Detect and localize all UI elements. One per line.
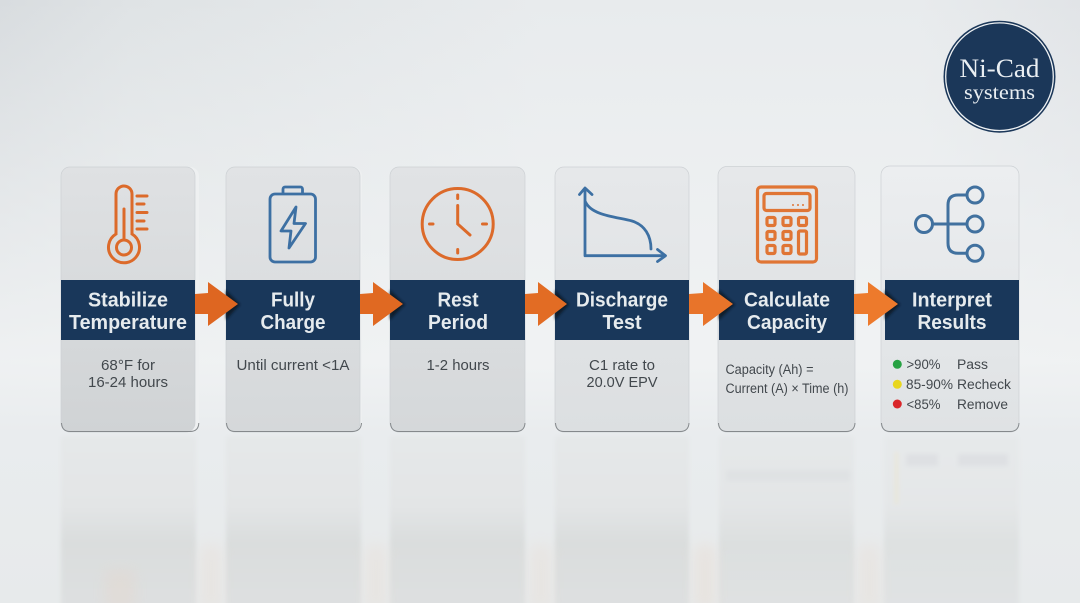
- text: capacity formula: Capacity (Ah) =: [726, 362, 814, 377]
- icon: calculator: [758, 187, 816, 262]
- heading band: rest period: Rest: [438, 290, 479, 312]
- panel: step 6 interpret results: [881, 166, 1019, 432]
- heading band: rest period: [390, 280, 525, 340]
- panel: step 1 stabilize temperature: [61, 167, 199, 432]
- text: temperature details: 16-24 hours: [88, 375, 168, 391]
- panel: step 2 fully charge: [226, 167, 362, 432]
- icon: clock: [422, 188, 493, 260]
- panel: step 3 rest period: [390, 167, 525, 432]
- legend: result thresholds: <85%: [906, 397, 940, 412]
- text: discharge details: C1 rate to: [589, 358, 655, 374]
- heading band: stabilize temperature: Temperature: [69, 312, 187, 334]
- text: temperature details: 68°F for: [101, 358, 155, 374]
- legend: result thresholds: Remove: [957, 397, 1008, 412]
- text: charge details: Until current <1A: [236, 358, 350, 374]
- icon: thermometer: [108, 186, 147, 263]
- text: discharge details: 20.0V EPV: [586, 375, 658, 391]
- heading band: discharge test: Discharge: [576, 290, 668, 312]
- heading band: calculate capacity: Calculate: [744, 290, 830, 312]
- heading band: fully charge: Fully: [271, 290, 316, 312]
- heading band: interpret results: Interpret: [912, 290, 992, 312]
- panel: step 4 discharge test: [555, 167, 689, 432]
- arrow: step 1 to 2: [195, 282, 240, 326]
- text: temperature details: [88, 358, 168, 391]
- heading band: discharge test: [555, 280, 689, 340]
- legend: result thresholds: >90%: [906, 357, 940, 372]
- text: capacity formula: Current (A) × Time (h): [726, 381, 848, 396]
- heading band: fully charge: Charge: [260, 312, 326, 334]
- text: discharge details: [586, 358, 658, 391]
- arrow: step 3 to 4: [525, 282, 569, 326]
- heading band: stabilize temperature: Stabilize: [88, 290, 168, 312]
- heading band: stabilize temperature: [61, 280, 195, 340]
- heading band: discharge test: Test: [602, 312, 642, 334]
- warm arrow reflections: [105, 545, 880, 603]
- icon: discharge curve chart: [580, 188, 666, 262]
- heading band: interpret results: [885, 280, 1019, 340]
- logo: Ni-Cad systems: systems: [964, 82, 1035, 104]
- text: rest details: 1-2 hours: [426, 358, 490, 374]
- text: capacity formula: [726, 362, 848, 396]
- heading band: rest period: Period: [428, 312, 488, 334]
- logo: Ni-Cad systems: Ni-Cad: [960, 54, 1040, 83]
- legend: result thresholds: [893, 357, 1011, 412]
- icon: battery with bolt: [270, 187, 316, 262]
- arrow: step 4 to 5: [689, 282, 735, 326]
- heading band: fully charge: [226, 280, 360, 340]
- panel: step 5 calculate capacity: [718, 166, 855, 432]
- arrow: step 5 to 6: [854, 282, 900, 326]
- heading band: calculate capacity: [719, 280, 854, 340]
- heading band: interpret results: Results: [918, 312, 986, 334]
- heading band: calculate capacity: Capacity: [747, 312, 828, 334]
- legend: result thresholds: Pass: [957, 357, 988, 372]
- icon: branching network: [916, 187, 983, 261]
- floor reflections of cards: [61, 436, 1019, 603]
- legend: result thresholds: 85-90%: [906, 377, 953, 392]
- logo: Ni-Cad systems: [944, 21, 1056, 133]
- legend: result thresholds: Recheck: [957, 377, 1011, 392]
- arrow: step 2 to 3: [360, 282, 405, 326]
